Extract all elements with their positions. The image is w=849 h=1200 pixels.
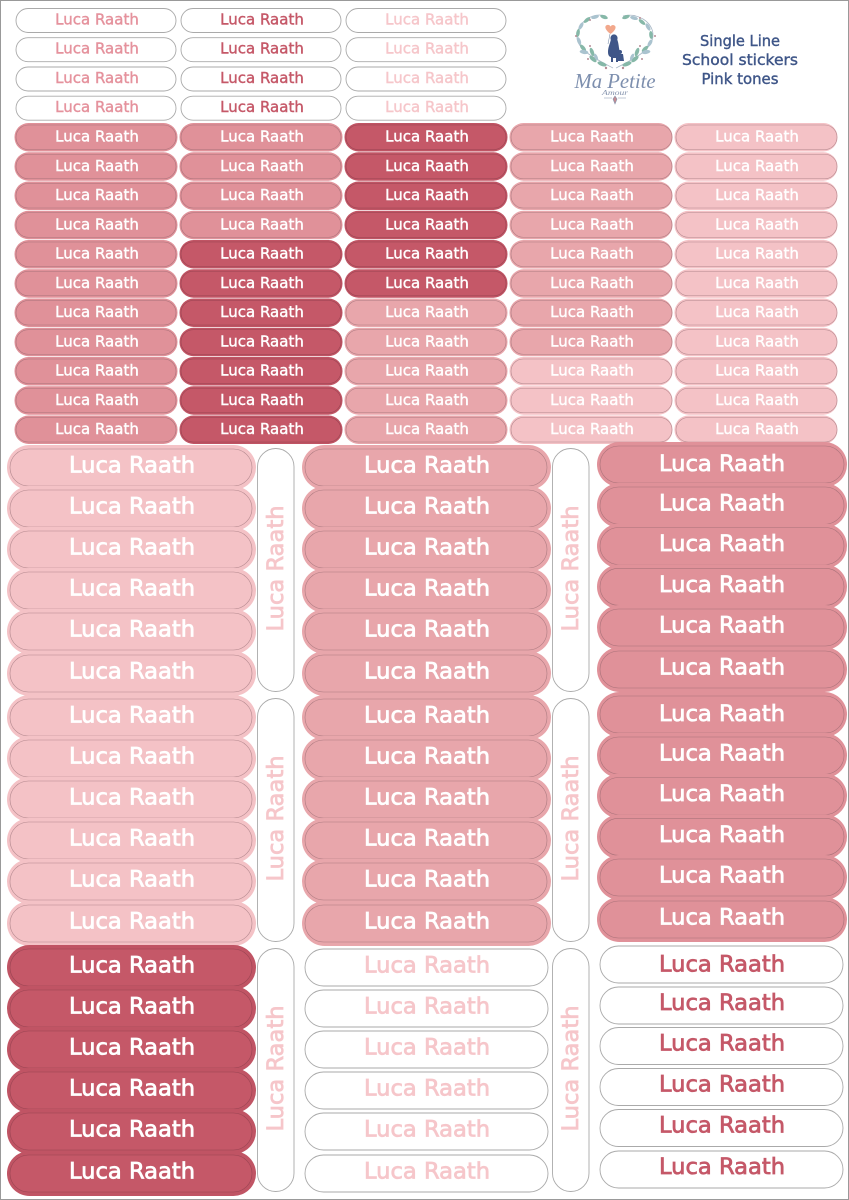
sticker — [674, 328, 838, 356]
sticker — [7, 945, 256, 990]
sticker — [302, 901, 551, 946]
sticker: Luca Raath — [69, 616, 195, 642]
sticker: Luca Raath — [220, 215, 304, 233]
sticker — [7, 986, 256, 1031]
sticker: Luca Raath — [55, 332, 139, 350]
sticker: Luca Raath — [715, 186, 799, 204]
sticker: Luca Raath — [55, 362, 139, 380]
sticker: Luca Raath — [69, 534, 195, 560]
sticker: Luca Raath — [55, 244, 139, 262]
sticker: Luca Raath — [220, 10, 304, 28]
panel: large light pink stickers, left block 1 — [7, 445, 256, 696]
sticker: Luca Raath — [364, 494, 490, 520]
sticker: Luca Raath — [55, 40, 139, 58]
sticker: Luca Raath — [550, 274, 634, 292]
sticker — [180, 240, 342, 268]
sticker — [597, 524, 847, 568]
sticker: Luca Raath — [385, 98, 469, 116]
sticker — [181, 8, 341, 32]
sticker — [302, 777, 551, 822]
sticker — [344, 123, 508, 152]
sticker: Luca Raath — [55, 69, 139, 87]
sticker — [674, 211, 838, 239]
sticker — [180, 123, 342, 152]
sticker: Luca Raath — [55, 10, 139, 28]
sticker: Luca Raath — [69, 702, 195, 728]
sticker — [344, 416, 508, 444]
sticker — [510, 357, 672, 386]
sticker: Luca Raath — [385, 10, 469, 28]
sticker — [258, 698, 294, 942]
sticker: Luca Raath — [55, 157, 139, 175]
sticker — [7, 818, 256, 863]
sticker: Luca Raath — [659, 862, 785, 888]
sticker — [7, 651, 256, 696]
sticker: Luca Raath — [659, 490, 785, 516]
sticker — [305, 949, 548, 986]
sticker: Luca Raath — [69, 744, 195, 770]
panel: top white small stickers — [16, 8, 506, 120]
sticker: Luca Raath — [715, 128, 799, 146]
panel: large white stickers, right block 3 — [600, 946, 843, 1188]
sticker — [16, 96, 176, 120]
sticker: Luca Raath — [550, 420, 634, 438]
sticker — [180, 328, 342, 356]
sticker: Luca Raath — [220, 244, 304, 262]
sticker: Luca Raath — [55, 98, 139, 116]
sticker: Luca Raath — [263, 1005, 289, 1132]
sticker — [180, 357, 342, 386]
sticker — [674, 298, 838, 327]
panel: vertical white stickers, column 1 — [258, 448, 294, 1192]
sticker — [597, 774, 847, 818]
sticker: Luca Raath — [220, 69, 304, 87]
sticker — [674, 357, 838, 386]
sticker: Luca Raath — [659, 1154, 785, 1180]
sticker — [510, 298, 672, 327]
sticker: Luca Raath — [55, 420, 139, 438]
sticker: Luca Raath — [364, 534, 490, 560]
sticker: Luca Raath — [69, 866, 195, 892]
sticker — [14, 152, 178, 181]
sticker: Luca Raath — [364, 744, 490, 770]
sticker — [16, 38, 176, 62]
sticker: Luca Raath — [715, 362, 799, 380]
sticker — [302, 695, 551, 740]
sticker: Luca Raath — [220, 186, 304, 204]
sticker: Luca Raath — [659, 1030, 785, 1056]
panel: large dark pink stickers, left block 3 — [7, 945, 256, 1196]
sticker: Luca Raath — [364, 994, 490, 1020]
logo name: Ma Petite — [574, 69, 656, 93]
sticker: Luca Raath — [550, 362, 634, 380]
sticker — [181, 67, 341, 91]
logo: Ma Petite Amour — [574, 14, 656, 104]
sticker: Luca Raath — [715, 391, 799, 409]
sticker: Luca Raath — [364, 784, 490, 810]
sticker — [600, 1068, 843, 1106]
sticker — [344, 298, 508, 327]
sticker — [344, 386, 508, 415]
sticker — [510, 416, 672, 444]
sticker: Luca Raath — [364, 1034, 490, 1060]
sticker: Luca Raath — [364, 1158, 490, 1184]
sticker: Luca Raath — [385, 40, 469, 58]
sticker — [302, 818, 551, 863]
sticker — [7, 1068, 256, 1113]
sticker — [180, 182, 342, 210]
sticker: Luca Raath — [69, 952, 195, 978]
icon: girl silhouette — [608, 34, 624, 62]
heading: sheet description — [682, 33, 798, 88]
sticker: Luca Raath — [385, 391, 469, 409]
panel: small stickers column 4 — [510, 123, 672, 444]
sticker: Luca Raath — [385, 69, 469, 87]
sticker: Luca Raath — [220, 157, 304, 175]
sticker: Luca Raath — [220, 128, 304, 146]
sticker — [552, 948, 589, 1192]
sticker — [600, 987, 843, 1024]
sticker: Luca Raath — [550, 332, 634, 350]
sticker — [7, 568, 256, 613]
sticker — [16, 67, 176, 91]
sticker — [14, 182, 178, 210]
panel: small stickers column 1 — [14, 123, 178, 444]
sticker: Luca Raath — [55, 128, 139, 146]
sticker — [674, 123, 838, 152]
sticker: Luca Raath — [550, 391, 634, 409]
logo subname: Amour — [601, 88, 628, 97]
sticker — [344, 152, 508, 181]
icon: heart balloon — [605, 25, 616, 34]
sticker — [14, 386, 178, 415]
panel: small stickers column 2 — [180, 123, 342, 444]
sticker: Luca Raath — [659, 654, 785, 680]
sticker — [346, 38, 506, 62]
sticker — [180, 269, 342, 298]
sticker: Luca Raath — [220, 332, 304, 350]
sticker — [346, 96, 506, 120]
sticker: Luca Raath — [659, 781, 785, 807]
sticker: Luca Raath — [69, 1116, 195, 1142]
sticker: Luca Raath — [550, 303, 634, 321]
panel: large light pink stickers, left block 2 — [7, 695, 256, 946]
sticker: Luca Raath — [69, 452, 195, 478]
sticker: Luca Raath — [55, 391, 139, 409]
sticker: Luca Raath — [385, 215, 469, 233]
sticker — [344, 357, 508, 386]
sticker: Luca Raath — [715, 332, 799, 350]
sticker: Luca Raath — [220, 274, 304, 292]
sticker — [258, 948, 294, 1192]
sticker: Luca Raath — [364, 908, 490, 934]
sticker — [674, 152, 838, 181]
sticker — [600, 1151, 843, 1188]
sticker: Luca Raath — [220, 362, 304, 380]
sticker: Luca Raath — [558, 755, 584, 882]
sticker: Luca Raath — [55, 215, 139, 233]
panel: large rose stickers, right block 2 — [597, 692, 847, 942]
sticker — [7, 1027, 256, 1072]
sticker: Luca Raath — [715, 274, 799, 292]
panel: large medium pink stickers, middle block 2 — [302, 695, 551, 946]
panel: vertical white stickers, column 2 — [552, 448, 589, 1192]
sticker — [510, 269, 672, 298]
sticker — [302, 445, 551, 490]
sticker — [7, 445, 256, 490]
sticker — [180, 152, 342, 181]
sticker — [344, 182, 508, 210]
sticker — [7, 1151, 256, 1196]
sticker — [14, 298, 178, 327]
sticker — [305, 1155, 548, 1192]
sticker — [600, 946, 843, 983]
sticker: Luca Raath — [385, 274, 469, 292]
sticker — [510, 123, 672, 152]
sticker — [597, 855, 847, 900]
sticker: Luca Raath — [385, 244, 469, 262]
sticker — [7, 609, 256, 654]
sticker: Luca Raath — [220, 420, 304, 438]
sticker: Luca Raath — [69, 576, 195, 602]
icon: heart wreath — [575, 14, 656, 69]
sticker — [302, 486, 551, 531]
sticker — [674, 416, 838, 444]
heading: sheet description: Single Line — [700, 33, 780, 50]
sticker — [305, 1113, 548, 1150]
sticker: Luca Raath — [558, 505, 584, 632]
sticker — [510, 386, 672, 415]
sticker — [180, 211, 342, 239]
sticker: Luca Raath — [263, 505, 289, 632]
sticker: Luca Raath — [220, 391, 304, 409]
logo ornament — [604, 96, 626, 104]
sticker: Luca Raath — [659, 990, 785, 1016]
sticker: Luca Raath — [659, 904, 785, 930]
sticker: Luca Raath — [550, 186, 634, 204]
sticker — [597, 605, 847, 650]
sticker: Luca Raath — [364, 576, 490, 602]
sticker — [600, 1028, 843, 1064]
sticker: Luca Raath — [220, 98, 304, 116]
sticker: Luca Raath — [364, 1076, 490, 1102]
sticker — [180, 298, 342, 327]
sticker — [597, 814, 847, 859]
sticker: Luca Raath — [385, 186, 469, 204]
sticker: Luca Raath — [69, 908, 195, 934]
sticker — [344, 328, 508, 356]
heading: sheet description: Pink tones — [702, 71, 778, 88]
sticker — [14, 416, 178, 444]
sticker: Luca Raath — [69, 1158, 195, 1184]
sticker: Luca Raath — [263, 755, 289, 882]
sticker: Luca Raath — [385, 128, 469, 146]
panel: small stickers column 5 — [674, 123, 838, 444]
sticker — [346, 67, 506, 91]
sticker — [302, 609, 551, 654]
sticker — [346, 8, 506, 32]
sticker: Luca Raath — [659, 822, 785, 848]
sticker — [552, 448, 589, 692]
sticker: Luca Raath — [659, 451, 785, 477]
sticker — [180, 416, 342, 444]
sticker — [181, 38, 341, 62]
sticker — [510, 328, 672, 356]
sticker — [7, 1109, 256, 1154]
sticker — [510, 211, 672, 239]
sticker: Luca Raath — [364, 702, 490, 728]
sticker: Luca Raath — [220, 303, 304, 321]
sticker: Luca Raath — [550, 244, 634, 262]
sticker — [14, 357, 178, 386]
sticker: Luca Raath — [550, 157, 634, 175]
sticker: Luca Raath — [550, 215, 634, 233]
sticker — [7, 486, 256, 531]
sticker — [14, 328, 178, 356]
sticker: Luca Raath — [385, 303, 469, 321]
sticker — [597, 733, 847, 778]
sticker: Luca Raath — [69, 994, 195, 1020]
sticker: Luca Raath — [715, 303, 799, 321]
sticker: Luca Raath — [558, 1005, 584, 1132]
sticker: Luca Raath — [69, 826, 195, 852]
sticker: Luca Raath — [55, 303, 139, 321]
sticker: Luca Raath — [659, 1112, 785, 1138]
sticker: Luca Raath — [69, 784, 195, 810]
sticker — [597, 564, 847, 609]
sticker: Luca Raath — [385, 157, 469, 175]
sticker: Luca Raath — [385, 420, 469, 438]
heading: sheet description: School stickers — [682, 52, 798, 69]
sticker — [674, 386, 838, 415]
sticker — [7, 527, 256, 572]
sticker — [597, 692, 847, 737]
sticker — [674, 240, 838, 268]
sticker: Luca Raath — [715, 244, 799, 262]
sticker: Luca Raath — [69, 494, 195, 520]
panel: large medium pink stickers, middle block 1 — [302, 445, 551, 696]
sticker — [600, 1110, 843, 1146]
sticker — [302, 568, 551, 613]
sticker: Luca Raath — [69, 658, 195, 684]
sticker: Luca Raath — [659, 572, 785, 598]
sticker: Luca Raath — [659, 1072, 785, 1098]
sticker — [14, 211, 178, 239]
sticker: Luca Raath — [364, 952, 490, 978]
sticker — [344, 240, 508, 268]
sticker: Luca Raath — [385, 362, 469, 380]
sticker — [258, 448, 294, 692]
sticker — [302, 651, 551, 696]
sticker — [344, 269, 508, 298]
sticker — [14, 240, 178, 268]
sticker — [597, 483, 847, 528]
sticker: Luca Raath — [364, 826, 490, 852]
sticker: Luca Raath — [364, 1116, 490, 1142]
sticker: Luca Raath — [364, 866, 490, 892]
sticker — [7, 859, 256, 904]
sticker — [344, 211, 508, 239]
sticker: Luca Raath — [659, 740, 785, 766]
sticker — [302, 527, 551, 572]
sticker: Luca Raath — [715, 157, 799, 175]
sticker — [597, 442, 847, 487]
sticker: Luca Raath — [385, 332, 469, 350]
sticker: Luca Raath — [550, 128, 634, 146]
sticker — [552, 698, 589, 942]
sticker — [181, 96, 341, 120]
sticker: Luca Raath — [659, 531, 785, 557]
sticker — [510, 152, 672, 181]
panel: large rose stickers, right block 1 — [597, 442, 847, 692]
sticker — [305, 1031, 548, 1068]
sticker: Luca Raath — [220, 40, 304, 58]
sticker: Luca Raath — [69, 1034, 195, 1060]
sticker — [302, 859, 551, 904]
sticker: Luca Raath — [364, 616, 490, 642]
panel: large white stickers, middle block 3 — [305, 949, 548, 1192]
sticker — [674, 269, 838, 298]
sticker: Luca Raath — [364, 452, 490, 478]
sticker — [7, 901, 256, 946]
sticker — [510, 182, 672, 210]
sticker — [14, 269, 178, 298]
sticker — [302, 736, 551, 781]
sticker: Luca Raath — [659, 612, 785, 638]
sticker — [510, 240, 672, 268]
sticker — [597, 897, 847, 942]
sticker: Luca Raath — [715, 215, 799, 233]
sticker — [14, 123, 178, 152]
sticker — [597, 647, 847, 692]
sticker: Luca Raath — [659, 952, 785, 978]
sticker — [7, 777, 256, 822]
sticker: Luca Raath — [715, 420, 799, 438]
sticker — [305, 1072, 548, 1109]
panel: small stickers column 3 — [344, 123, 508, 444]
sticker — [16, 8, 176, 32]
sticker — [7, 736, 256, 781]
sticker — [180, 386, 342, 415]
sticker — [674, 182, 838, 210]
sticker: Luca Raath — [364, 658, 490, 684]
sticker: Luca Raath — [55, 186, 139, 204]
sticker: Luca Raath — [55, 274, 139, 292]
sticker — [305, 990, 548, 1027]
sticker: Luca Raath — [69, 1076, 195, 1102]
sticker — [7, 695, 256, 740]
sticker: Luca Raath — [659, 701, 785, 727]
